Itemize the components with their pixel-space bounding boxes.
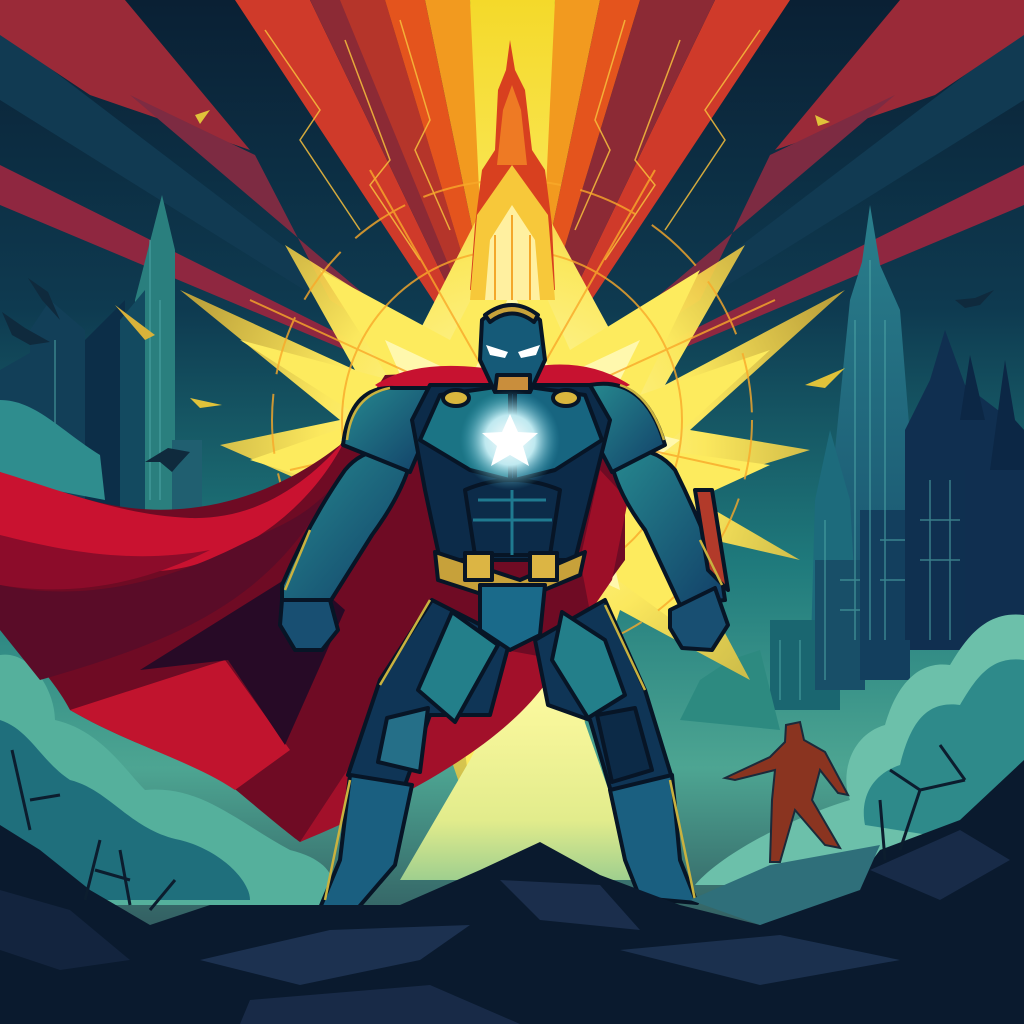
foreground ground	[0, 760, 1024, 1024]
skyline window details	[55, 240, 960, 700]
hero figure	[280, 305, 728, 908]
pelvis	[480, 585, 545, 650]
background beam beneath hero	[400, 680, 640, 880]
radiating rays	[0, 0, 1024, 420]
right skyline	[680, 205, 1024, 730]
shoulder gold	[443, 390, 469, 406]
flying creatures	[2, 110, 994, 472]
star chest emblem	[460, 390, 560, 490]
legs	[320, 600, 697, 908]
glowing line arcs	[250, 170, 775, 660]
armor gold trim	[285, 385, 722, 900]
left cloud	[0, 400, 334, 905]
central tower	[470, 40, 555, 300]
dead branches	[12, 745, 965, 910]
left arm	[280, 388, 430, 650]
right arm	[590, 384, 728, 650]
enemy figure	[725, 722, 848, 862]
belt	[435, 552, 585, 600]
head	[480, 305, 545, 392]
torso	[412, 385, 610, 560]
left skyline	[0, 195, 202, 520]
sunburst	[180, 150, 845, 800]
red cape	[0, 364, 630, 842]
right cloud	[695, 614, 1024, 885]
ray crack lines	[265, 20, 760, 260]
